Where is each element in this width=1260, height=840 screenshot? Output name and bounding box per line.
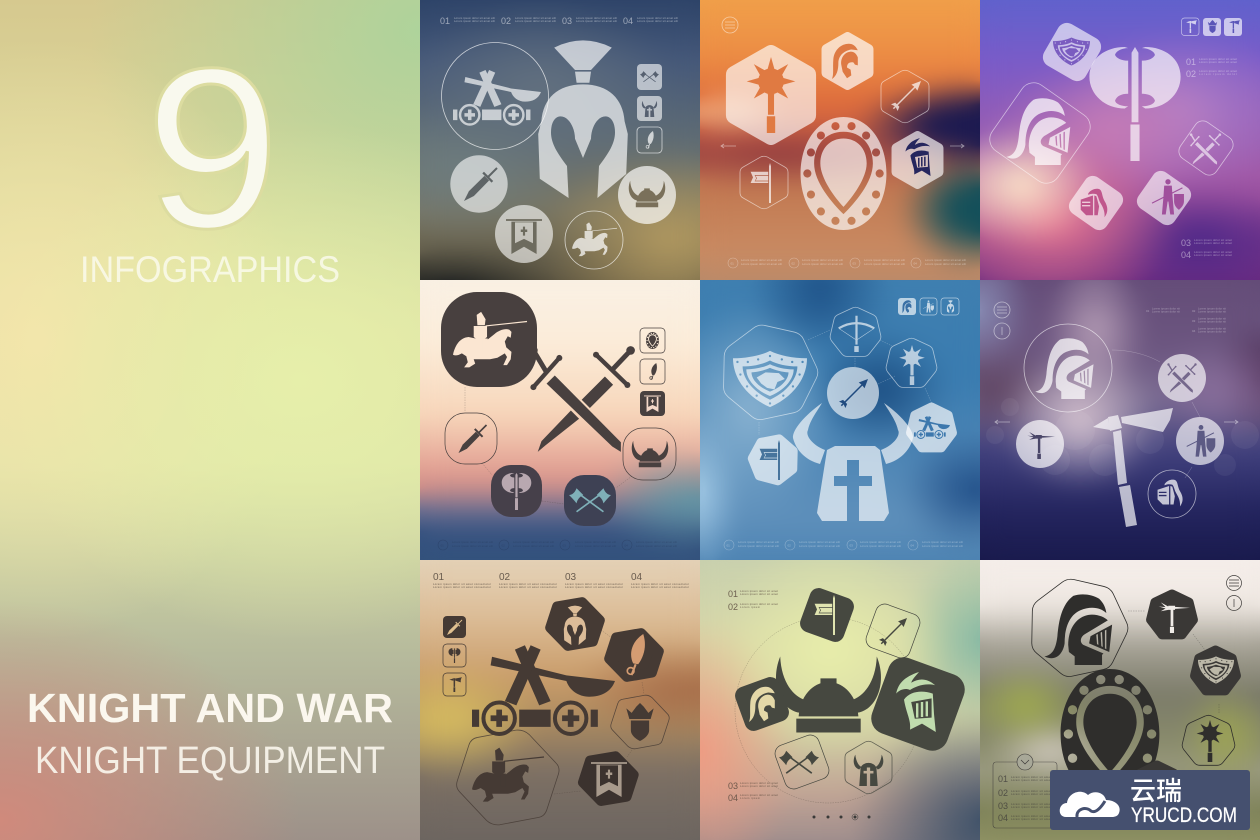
numbered legend: Lorem ipsum dolor sit amet — [740, 784, 778, 788]
numbered legend: Lorem ipsum dolor sit — [1152, 310, 1180, 314]
numbered legend: Lorem ipsum dolor sit amet elit — [864, 258, 905, 262]
crest tile — [1039, 19, 1105, 85]
numbered legend: 03 — [728, 781, 738, 791]
warrior tile — [1133, 167, 1195, 229]
numbered legend: 03 — [852, 262, 856, 266]
big number 9: 9 — [145, 22, 280, 276]
knight heptagon — [1020, 569, 1136, 683]
numbered legend: 02 — [788, 544, 791, 548]
mace heptagon — [886, 338, 937, 387]
numbered legend: Lorem ipsum dolor sit amet — [1194, 238, 1232, 242]
warrior circle — [1176, 417, 1224, 465]
banner circle — [495, 205, 553, 263]
menu icon — [994, 302, 1010, 318]
numbered legend: Lorem ipsum dolor sit amet elit — [864, 262, 905, 266]
connectors — [759, 330, 932, 435]
numbered legend: 02 — [499, 572, 511, 583]
numbered legend: Lorem ipsum dolor sit amet consectetur — [433, 582, 491, 586]
numbered legend: Lorem ipsum dolor sit amet elit — [515, 19, 556, 23]
falchion heptagon — [606, 626, 662, 684]
spartan heptagon — [547, 595, 603, 653]
panel 2: shield on orange — [700, 0, 980, 280]
numbered legend: Lorem ipsum dolor sit amet elit — [738, 544, 779, 548]
numbered box: 03 — [998, 801, 1008, 811]
numbered legend — [1181, 57, 1237, 260]
numbered box: Lorem ipsum dolor sit amet — [1011, 775, 1051, 779]
connectors — [1128, 611, 1219, 714]
main title: KNIGHT AND WAR — [27, 685, 393, 731]
numbered legend: Lorem ipsum dolor sit — [1198, 316, 1226, 320]
connectors — [1112, 350, 1200, 478]
numbered legend: Lorem ipsum dolor sit amet elit — [452, 544, 493, 548]
numbered legend: Lorem ipsum dolor sit amet elit — [925, 262, 966, 266]
numbered legend: 03 — [562, 544, 566, 548]
big plume tile — [867, 653, 969, 755]
panel 9: shield on forest — [980, 560, 1260, 840]
large helmet — [538, 40, 628, 198]
numbered legend: Lorem ipsum dolor sit — [1198, 306, 1226, 310]
connectors — [554, 630, 644, 794]
crest heptagon — [1195, 650, 1236, 691]
numbered legend: Lorem ipsum dolor sit — [1198, 310, 1226, 314]
numbered legend: Lorem ipsum dolor sit amet elit — [513, 540, 554, 544]
numbered legend: Lorem ipsum dolor sit amet elit — [799, 544, 840, 548]
panel 3: double axe on purple — [980, 0, 1260, 280]
panel 1: spartan helmet — [420, 0, 700, 280]
numbered legend: Lorem ipsum dolor sit amet — [1194, 241, 1232, 245]
numbered legend — [1146, 306, 1226, 334]
numbered legend: Lorem ipsum dolor sit amet elit — [454, 16, 495, 20]
crossed swords circle — [1158, 354, 1206, 402]
numbered legend: Lorem ipsum dolor sit amet elit — [741, 258, 782, 262]
connectors — [465, 387, 632, 504]
sword tile — [445, 413, 497, 464]
horse heptagon — [448, 716, 568, 839]
numbered legend: Lorem ipsum dolor sit amet elit — [576, 16, 617, 20]
catapult — [472, 645, 615, 734]
crossed swords — [529, 346, 635, 452]
numbered legend: 02 — [502, 544, 505, 548]
numbered legend: Lorem ipsum dolor sit — [1198, 326, 1226, 330]
numbered legend — [440, 16, 678, 26]
numbered legend: 01 — [728, 589, 738, 599]
bokeh — [986, 398, 1259, 476]
crown heptagon — [606, 687, 674, 757]
numbered legend — [728, 589, 778, 803]
subtitle: KNIGHT EQUIPMENT — [35, 740, 385, 782]
numbered legend: 02 — [501, 16, 511, 26]
numbered legend: 03 — [1192, 319, 1196, 323]
panel 8: viking helmet on green — [700, 560, 980, 840]
flag hexagon — [740, 156, 788, 209]
numbered legend: Lorem ipsum dolor sit amet consectetur — [631, 585, 689, 589]
top icons — [1182, 18, 1242, 36]
menu icon — [722, 17, 738, 33]
numbered legend: Lorem ipsum dolor sit amet consectetur — [499, 585, 557, 589]
numbered box: Lorem ipsum dolor sit amet — [1011, 778, 1051, 782]
great helm — [793, 403, 913, 521]
arrow circle — [827, 367, 879, 419]
horned helmet heptagon — [845, 741, 892, 794]
numbered legend: Lorem ipsum dolor sit amet elit — [513, 544, 554, 548]
numbered legend — [438, 540, 677, 550]
numbered legend: Lorem ipsum dolor sit amet elit — [925, 258, 966, 262]
hammer heptagon — [1151, 594, 1193, 635]
knight circle — [1024, 324, 1112, 412]
numbered legend: 02 — [1186, 69, 1196, 79]
sword circle — [450, 155, 508, 213]
viking tile — [623, 428, 676, 480]
numbered legend: Lorem ipsum dolor sit amet — [740, 781, 778, 785]
numbered legend — [724, 540, 963, 550]
numbered legend: 03 — [850, 544, 853, 548]
icon: cloud — [1060, 792, 1120, 817]
numbered legend: Lorem ipsum dolor — [1199, 72, 1237, 76]
arrow tile — [864, 602, 922, 660]
numbered legend: 03 — [562, 16, 572, 26]
numbered legend: Lorem ipsum dolor sit amet elit — [802, 258, 843, 262]
small icons — [898, 298, 959, 315]
numbered legend: Lorem ipsum dolor sit — [1198, 320, 1226, 324]
numbered legend: 03 — [565, 572, 577, 583]
numbered box: Lorem ipsum dolor sit amet — [1011, 817, 1051, 821]
crossbow heptagon — [830, 307, 881, 356]
numbered legend: Lorem ipsum dolor sit amet elit — [860, 540, 901, 544]
numbered box: Lorem ipsum dolor sit amet — [1011, 789, 1051, 793]
numbered legend: Lorem ipsum dolor sit amet elit — [799, 540, 840, 544]
axes tile — [564, 475, 616, 526]
numbered legend: Lorem ipsum dolor sit amet elit — [802, 262, 843, 266]
viking circle — [618, 166, 676, 224]
panel 6: tomahawk on dusk — [980, 280, 1260, 560]
numbered legend: Lorem ipsum dolor sit amet elit — [576, 19, 617, 23]
numbered legend: 01 — [1146, 309, 1150, 313]
numbered legend: Lorem ipsum dolor sit amet — [1199, 57, 1237, 61]
numbered legend: Lorem ipsum dolor sit amet elit — [922, 540, 963, 544]
dotted ring — [735, 617, 921, 803]
armour circle — [1148, 470, 1196, 518]
numbered legend: Lorem ipsum dolor sit amet elit — [637, 19, 678, 23]
spartan tile — [733, 675, 791, 733]
numbered legend: 01 — [730, 262, 734, 266]
numbered legend: Lorem ipsum dolor sit amet — [1199, 60, 1237, 64]
numbered legend: Lorem ipsum dolor sit amet elit — [452, 540, 493, 544]
small icons — [637, 64, 662, 153]
numbered legend: 01 — [440, 544, 444, 548]
numbered box: Lorem ipsum dolor sit amet — [1011, 805, 1051, 809]
numbered legend: 04 — [623, 16, 633, 26]
mace hexagon — [734, 54, 808, 136]
hammer circle — [1016, 420, 1064, 468]
spartan hexagon — [826, 37, 869, 85]
numbered legend: 01 — [433, 572, 445, 583]
numbered legend: 01 — [726, 544, 730, 548]
shield heptagon — [712, 315, 825, 426]
numbered legend: 01 — [1186, 57, 1196, 67]
navigation arrows — [995, 420, 1238, 424]
numbered legend: 04 — [631, 572, 643, 583]
numbered legend: Lorem ipsum dolor sit amet consectetur — [499, 582, 557, 586]
numbered legend: Lorem ipsum dolor sit amet elit — [575, 544, 616, 548]
armour tile — [1065, 172, 1127, 234]
numbered legend: Lorem ipsum dolor sit amet — [1194, 250, 1232, 254]
numbered legend: Lorem ipsum dolor sit amet elit — [636, 540, 677, 544]
numbered legend: Lorem ipsum dolor sit amet consectetur — [433, 585, 491, 589]
flag tile — [798, 586, 856, 644]
menu icon — [1226, 576, 1242, 590]
numbered legend — [728, 258, 966, 268]
numbered legend: Lorem ipsum dolor sit — [1152, 306, 1180, 310]
numbered legend: Lorem ipsum dolor sit amet — [1194, 253, 1232, 257]
numbered legend: Lorem ipsum — [740, 796, 761, 800]
panel 7: catapult on amber — [420, 560, 700, 840]
mace heptagon — [1182, 715, 1235, 765]
numbered legend: Lorem ipsum dolor sit amet elit — [636, 544, 677, 548]
knight tile — [441, 292, 537, 387]
lower heptagon — [1136, 765, 1178, 806]
numbered legend: Lorem ipsum dolor sit amet — [1199, 69, 1237, 73]
large tomahawk — [1093, 408, 1173, 527]
numbered box — [993, 754, 1057, 828]
panel: cover title — [0, 0, 420, 840]
numbered legend: Lorem ipsum dolor sit amet consectetur — [565, 585, 623, 589]
central shield — [801, 117, 886, 230]
labrys tile — [491, 465, 542, 517]
small icons — [443, 616, 466, 696]
numbered legend: Lorem ipsum dolor sit amet consectetur — [631, 582, 689, 586]
numbered legend: 04 — [914, 262, 917, 266]
numbered legend: 03 — [1181, 238, 1191, 248]
panel 4: crossed swords on sunset — [420, 280, 700, 560]
numbered legend: Lorem ipsum dolor sit amet elit — [738, 540, 779, 544]
banner heptagon — [579, 749, 637, 808]
infographics label: INFOGRAPHICS — [80, 249, 340, 290]
numbered legend: 04 — [728, 793, 738, 803]
large viking helmet — [776, 657, 881, 732]
numbered legend — [433, 572, 689, 589]
numbered legend: 02 — [728, 602, 738, 612]
crossed swords tile — [1175, 117, 1237, 179]
panel 5: great helm on blue — [700, 280, 980, 560]
numbered legend: Lorem ipsum dolor sit — [1198, 330, 1226, 334]
numbered legend: Lorem ipsum dolor sit amet elit — [515, 16, 556, 20]
helmet hexagon — [896, 136, 939, 184]
numbered legend: Lorem ipsum dolor sit amet elit — [922, 544, 963, 548]
numbered legend: Lorem ipsum dolor sit amet consectetur — [565, 582, 623, 586]
numbered box: Lorem ipsum dolor sit amet — [1011, 802, 1051, 806]
numbered legend: Lorem ipsum dolor sit amet elit — [637, 16, 678, 20]
numbered legend: Lorem ipsum dolor sit amet — [740, 589, 778, 593]
numbered box: 02 — [998, 788, 1008, 798]
watermark logo — [1050, 770, 1250, 830]
info icon — [1226, 596, 1242, 610]
numbered box: Lorem ipsum dolor sit amet — [1011, 814, 1051, 818]
large shield — [1061, 669, 1159, 799]
numbered legend: 01 — [440, 16, 450, 26]
numbered legend: Lorem ipsum dolor sit amet — [740, 793, 778, 797]
small icons — [640, 328, 665, 416]
numbered legend: Lorem ipsum — [740, 605, 761, 609]
numbered box: 04 — [998, 813, 1008, 823]
numbered legend: 04 — [1192, 329, 1196, 333]
knight tile — [984, 77, 1096, 189]
arrow hexagon — [881, 70, 929, 123]
numbered box: 01 — [998, 774, 1008, 784]
brand chinese name: 云瑞 — [1130, 776, 1182, 806]
numbered box: Lorem ipsum dolor sit amet — [1011, 792, 1051, 796]
large double axe — [1089, 47, 1181, 161]
catapult circle — [442, 42, 548, 150]
horse circle — [565, 211, 623, 269]
numbered legend: 04 — [624, 544, 628, 548]
numbered legend: Lorem ipsum dolor sit amet elit — [741, 262, 782, 266]
numbered legend: Lorem ipsum dolor sit amet elit — [575, 540, 616, 544]
pagination dots — [812, 814, 870, 820]
numbered legend: Lorem ipsum dolor sit amet — [740, 602, 778, 606]
info icon — [994, 323, 1010, 339]
numbered legend: Lorem ipsum dolor sit amet elit — [454, 19, 495, 23]
flag heptagon — [749, 434, 799, 483]
axes tile — [773, 733, 831, 791]
numbered legend: 02 — [1192, 309, 1196, 313]
catapult heptagon — [911, 407, 952, 448]
numbered legend: 02 — [792, 262, 795, 266]
numbered legend: 04 — [1181, 250, 1191, 260]
numbered legend: Lorem ipsum dolor sit amet — [740, 592, 778, 596]
numbered legend: 04 — [910, 544, 914, 548]
navigation arrows — [721, 144, 964, 148]
numbered legend: Lorem ipsum dolor sit amet elit — [860, 544, 901, 548]
